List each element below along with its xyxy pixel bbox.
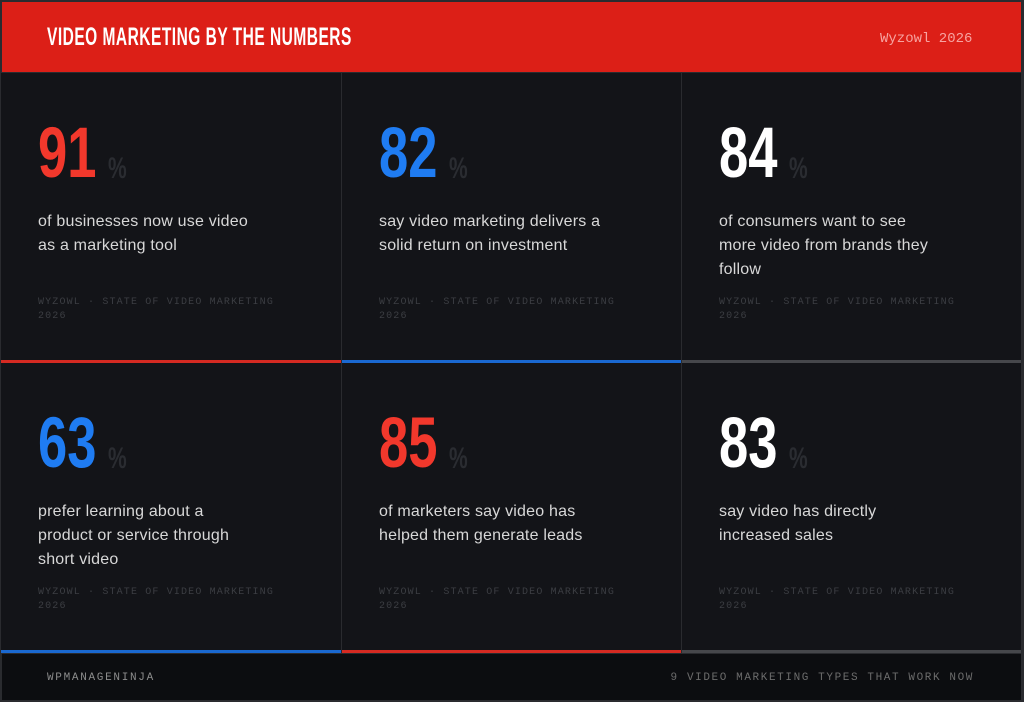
stat description bbox=[379, 213, 600, 254]
percent sign: % bbox=[449, 152, 468, 185]
stat description: prefer learning about a bbox=[38, 503, 204, 520]
percent sign: % bbox=[449, 442, 468, 475]
citation bbox=[719, 587, 955, 612]
stat description: say video marketing delivers a bbox=[379, 213, 600, 230]
stat description bbox=[719, 503, 876, 544]
stat description: helped them generate leads bbox=[379, 527, 583, 544]
stat description: follow bbox=[719, 261, 761, 278]
stat number: 82 bbox=[379, 114, 437, 193]
footer bbox=[2, 654, 1021, 700]
stat number: 63 bbox=[38, 404, 96, 483]
accent bar bbox=[1, 650, 341, 653]
stat description: of consumers want to see bbox=[719, 213, 906, 230]
citation bbox=[379, 297, 615, 322]
percent sign: % bbox=[108, 442, 127, 475]
citation bbox=[38, 297, 274, 322]
stat description: increased sales bbox=[719, 527, 833, 544]
citation bbox=[38, 587, 274, 612]
citation: 2026 bbox=[719, 601, 748, 612]
stat description: product or service through bbox=[38, 527, 229, 544]
citation: WYZOWL · STATE OF VIDEO MARKETING bbox=[38, 587, 274, 598]
citation bbox=[719, 297, 955, 322]
title: VIDEO MARKETING BY THE NUMBERS bbox=[47, 23, 352, 51]
citation: WYZOWL · STATE OF VIDEO MARKETING bbox=[379, 587, 615, 598]
header bar bbox=[2, 2, 1021, 72]
citation: 2026 bbox=[719, 311, 748, 322]
panel: 85% bbox=[342, 363, 681, 653]
panel: 63% bbox=[1, 363, 341, 653]
accent bar bbox=[682, 360, 1021, 363]
accent bar bbox=[1, 360, 341, 363]
citation: 2026 bbox=[38, 601, 67, 612]
stat description bbox=[379, 503, 583, 544]
citation: WYZOWL · STATE OF VIDEO MARKETING bbox=[379, 297, 615, 308]
accent bar bbox=[342, 360, 681, 363]
stat number: 85 bbox=[379, 404, 437, 483]
stat description: solid return on investment bbox=[379, 237, 567, 254]
stat number: 84 bbox=[719, 114, 777, 193]
panel: 82% bbox=[342, 73, 681, 363]
panel: 84% bbox=[682, 73, 1021, 363]
stat description: short video bbox=[38, 551, 118, 568]
stat description: say video has directly bbox=[719, 503, 876, 520]
citation: WYZOWL · STATE OF VIDEO MARKETING bbox=[38, 297, 274, 308]
stat number: 83 bbox=[719, 404, 777, 483]
stat description: more video from brands they bbox=[719, 237, 928, 254]
accent bar bbox=[682, 650, 1021, 653]
source label: Wyzowl 2026 bbox=[880, 31, 972, 47]
stat description: of businesses now use video bbox=[38, 213, 248, 230]
stat description: of marketers say video has bbox=[379, 503, 575, 520]
accent bar bbox=[342, 650, 681, 653]
citation: 2026 bbox=[379, 311, 408, 322]
citation: WYZOWL · STATE OF VIDEO MARKETING bbox=[719, 297, 955, 308]
stat number: 91 bbox=[38, 114, 96, 193]
stat description: as a marketing tool bbox=[38, 237, 177, 254]
citation bbox=[379, 587, 615, 612]
stat description bbox=[38, 503, 229, 568]
panel: 83% bbox=[682, 363, 1021, 653]
citation: WYZOWL · STATE OF VIDEO MARKETING bbox=[719, 587, 955, 598]
percent sign: % bbox=[789, 152, 808, 185]
percent sign: % bbox=[108, 152, 127, 185]
footer brand: WPMANAGENINJA bbox=[47, 672, 155, 684]
stat description bbox=[719, 213, 928, 278]
stat description bbox=[38, 213, 248, 254]
footer tagline: 9 VIDEO MARKETING TYPES THAT WORK NOW bbox=[671, 672, 974, 684]
panel: 91% bbox=[1, 73, 341, 363]
percent sign: % bbox=[789, 442, 808, 475]
citation: 2026 bbox=[38, 311, 67, 322]
citation: 2026 bbox=[379, 601, 408, 612]
